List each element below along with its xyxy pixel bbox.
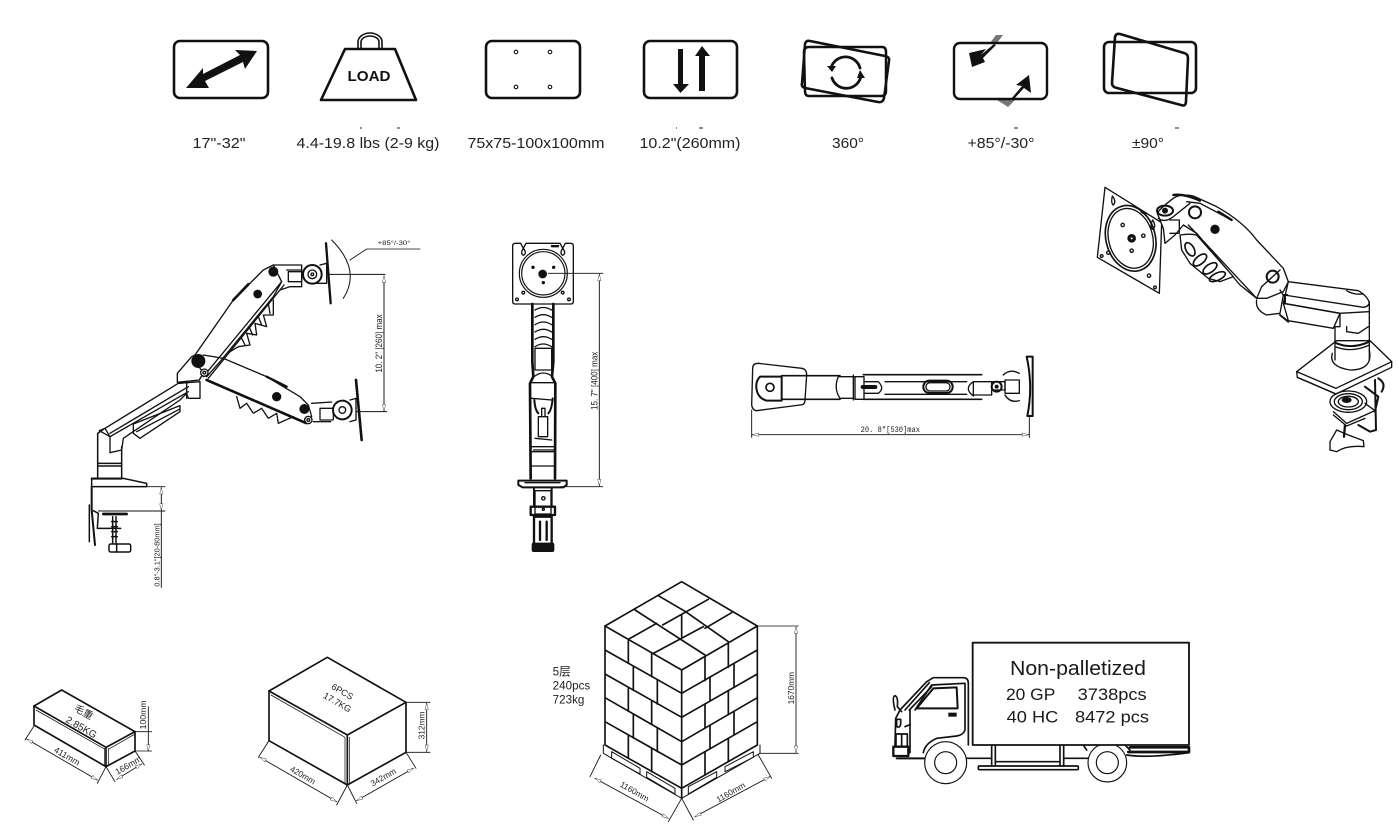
arm bbox=[782, 375, 982, 400]
dimension label: desk thickness: 0.8"-3.1"[20-80mm] bbox=[152, 523, 161, 587]
diagram: side view of arm with dimensions bbox=[89, 239, 420, 587]
label: 40 HC quantity: 8472 pcs bbox=[1075, 708, 1149, 727]
diagram: carton bbox=[258, 657, 430, 805]
mounting plate bbox=[513, 243, 573, 304]
dimension lines bbox=[752, 410, 1029, 437]
label: VESA: 75x75-100x100mm bbox=[468, 136, 604, 152]
spring teeth bbox=[1180, 234, 1233, 284]
label: weight value: 2.85KG bbox=[63, 715, 99, 741]
clamp and knob bbox=[1330, 378, 1384, 452]
icon: load weight bbox=[321, 33, 416, 100]
box outline bbox=[34, 690, 135, 767]
icon: load weight: LOAD bbox=[348, 68, 391, 85]
diagram: pallet of cartons bbox=[553, 582, 798, 822]
mounting plate bbox=[1097, 187, 1163, 293]
chassis bbox=[967, 745, 1189, 770]
label: height: 10.2"(260mm) bbox=[640, 136, 740, 152]
diagram: front view of arm with dimensions bbox=[513, 243, 603, 552]
right face bbox=[682, 626, 757, 788]
label: screen size: 17"-32" bbox=[192, 136, 246, 152]
icon row: specification icons bbox=[174, 33, 1196, 107]
top of stack bbox=[605, 582, 757, 670]
lower arm dashed position bbox=[203, 355, 312, 423]
icon: tilt bbox=[954, 35, 1047, 107]
label: piece count: 6PCS bbox=[330, 681, 355, 702]
icon: screen size bbox=[174, 41, 268, 98]
icon: height adjustment bbox=[644, 41, 737, 98]
label: carton weight: 17.7KG bbox=[322, 690, 353, 714]
label: 20 GP: 20 GP bbox=[1006, 685, 1055, 704]
head and plate bbox=[973, 357, 1033, 416]
dimension lines bbox=[548, 273, 603, 487]
pallet base bbox=[603, 745, 760, 798]
dimension label: height: 10. 2" [260] max bbox=[374, 314, 384, 373]
column bbox=[530, 304, 555, 478]
label: carton length: 420mm bbox=[288, 764, 317, 786]
upper arm raised bbox=[191, 265, 284, 378]
cargo box bbox=[973, 643, 1189, 745]
front wheel bbox=[925, 742, 967, 784]
rear wheel bbox=[1088, 743, 1127, 782]
dimension label: reach: 15. 7" [400] max bbox=[589, 351, 599, 410]
lower joint and plate bbox=[312, 380, 387, 440]
dimension lines bbox=[590, 626, 798, 822]
base bbox=[752, 363, 807, 411]
diagram: top view of arm with dimension bbox=[752, 357, 1033, 437]
cab bbox=[893, 678, 968, 758]
lower arm bbox=[1256, 282, 1369, 343]
dimension lines bbox=[25, 707, 152, 783]
icon: rotation 360 bbox=[802, 41, 889, 102]
label: height: 100mm bbox=[138, 700, 148, 729]
label: weight: 4.4-19.8 lbs (2-9 kg) bbox=[296, 136, 440, 152]
icon: swivel bbox=[1104, 34, 1196, 105]
upper joint and plate bbox=[273, 240, 420, 303]
label: length: 411mm bbox=[52, 745, 82, 768]
label: non-palletized: Non-palletized bbox=[1010, 658, 1146, 680]
label: layers: 5层 bbox=[553, 665, 571, 678]
dimension label: tilt: +85°/-30° bbox=[378, 239, 411, 247]
left face bbox=[605, 626, 682, 798]
upper arm bbox=[1157, 195, 1288, 298]
desk plate and pillar bbox=[1297, 340, 1392, 394]
carton outline bbox=[269, 657, 406, 785]
label: width: 166mm bbox=[113, 754, 143, 777]
lower arm bbox=[99, 382, 200, 453]
diagram: isometric view of arm bbox=[1097, 187, 1392, 452]
label: carton width: 342mm bbox=[369, 766, 398, 788]
diagram: truck with loading quantities bbox=[893, 643, 1189, 784]
label: gross weight: 毛重 bbox=[72, 701, 96, 723]
label: 40 HC: 40 HC bbox=[1007, 708, 1058, 727]
label: pieces: 240pcs bbox=[553, 679, 590, 692]
label: pallet weight: 723kg bbox=[553, 693, 584, 706]
icon: VESA pattern bbox=[486, 41, 580, 98]
label: carton height: 312mm bbox=[416, 711, 426, 739]
label: stack height: 1670mm bbox=[786, 672, 796, 704]
base and pillar bbox=[92, 429, 147, 487]
clamp bbox=[89, 487, 131, 552]
diagram: single product box bbox=[25, 690, 152, 783]
label: swivel: ±90° bbox=[1132, 136, 1164, 152]
label: pallet width: 1160mm bbox=[714, 780, 747, 804]
dimension label: depth: 20. 8"[530]max bbox=[861, 426, 920, 435]
label: 20 GP quantity: 3738pcs bbox=[1078, 685, 1147, 704]
icon labels bbox=[192, 128, 1179, 152]
dimension lines bbox=[95, 276, 384, 587]
base and clamp bbox=[518, 481, 567, 552]
dimension lines bbox=[258, 702, 430, 805]
hinge bbox=[177, 353, 207, 382]
label: tilt: +85°/-30° bbox=[968, 136, 1034, 152]
label: pallet length: 1160mm bbox=[618, 779, 651, 804]
label: rotation: 360° bbox=[832, 136, 864, 152]
